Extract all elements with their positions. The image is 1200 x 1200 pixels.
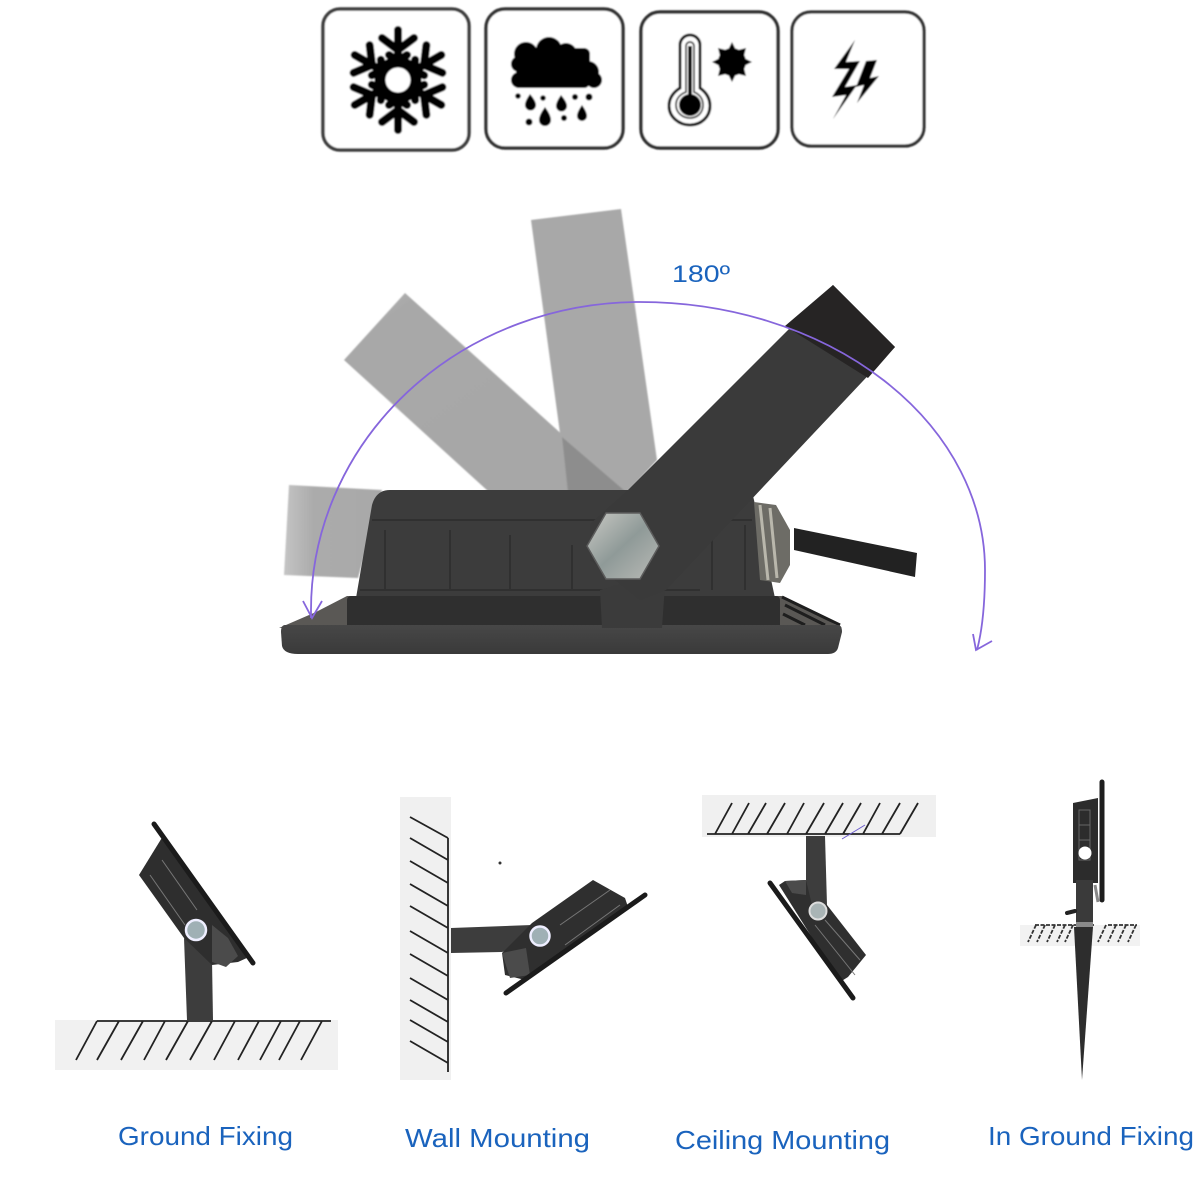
mounting: in ground fixing xyxy=(1020,782,1140,1080)
ground hatch dashed xyxy=(1028,925,1137,942)
label: ground fixing: Ground Fixing xyxy=(118,1121,293,1151)
mounting: ground fixing xyxy=(55,824,338,1070)
weather icons row xyxy=(323,9,924,150)
bolt head xyxy=(587,513,659,579)
faded bracket positions xyxy=(284,209,657,578)
ground hatch xyxy=(76,1021,331,1060)
front flange xyxy=(347,596,780,629)
mounting: wall mounting xyxy=(400,797,645,1080)
mounting: ceiling mounting xyxy=(702,795,936,998)
strut xyxy=(600,570,666,628)
label: in ground fixing: In Ground Fixing xyxy=(988,1121,1194,1151)
icon: thermometer and sun xyxy=(641,12,778,148)
cable gland xyxy=(754,502,790,583)
lamp housing xyxy=(279,285,917,654)
lamp on arm xyxy=(451,862,645,993)
icon: snowflake xyxy=(323,9,469,150)
ceiling hatch xyxy=(707,803,918,834)
lamp on ceiling post xyxy=(770,836,866,998)
lamp on spike xyxy=(1067,782,1102,1080)
icon: lightning bolts xyxy=(792,12,924,146)
base plate xyxy=(281,625,842,654)
icon: rain cloud xyxy=(486,9,623,148)
label: ceiling mounting: Ceiling Mounting xyxy=(675,1125,890,1155)
power cable xyxy=(794,528,917,577)
label: wall mounting: Wall Mounting xyxy=(405,1123,590,1153)
lamp on post xyxy=(139,824,253,1020)
LED fins on the plate xyxy=(279,596,842,628)
wall hatch xyxy=(410,817,448,1072)
angle label: 180º xyxy=(672,261,730,288)
product: tilt angle diagram xyxy=(279,209,992,654)
raised bracket xyxy=(590,285,895,600)
rotation arc arrow xyxy=(303,302,992,650)
